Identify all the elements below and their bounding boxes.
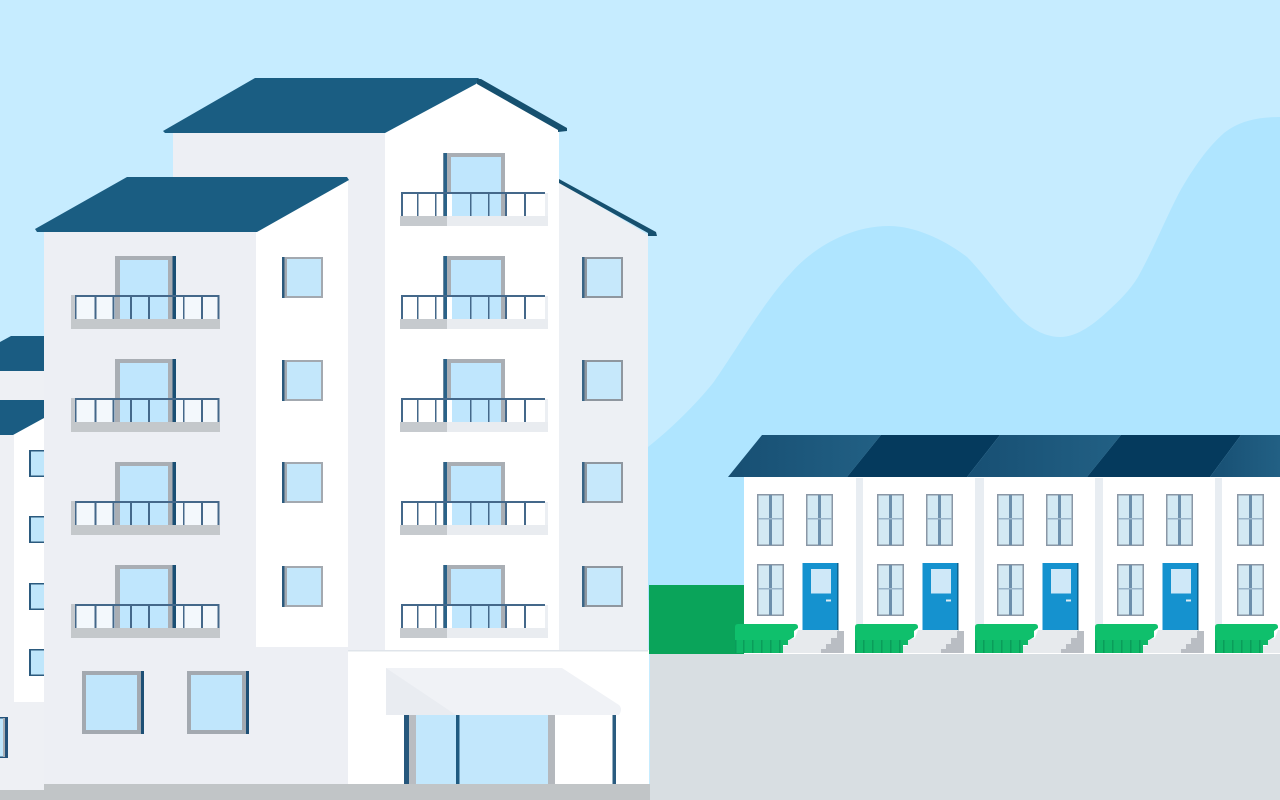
balconies right column: [400, 153, 548, 638]
far left building: [0, 336, 44, 790]
house unit four: [1095, 494, 1204, 653]
white face: [14, 414, 44, 702]
central strip: [348, 133, 385, 652]
row roof: [728, 435, 1280, 477]
party wall dividers: [856, 478, 1222, 653]
gable white face: [385, 83, 559, 652]
house unit three: [975, 494, 1084, 653]
ground floor window one: [82, 671, 144, 734]
rear wall: [0, 371, 44, 401]
ground floor window two: [187, 671, 249, 734]
side windows, left: [282, 257, 323, 607]
front side wall: [256, 180, 348, 647]
podium right: [348, 650, 649, 785]
hills: [648, 117, 1280, 600]
front left wall: [44, 232, 256, 785]
shop front: [404, 715, 616, 784]
terraced houses: [728, 435, 1280, 654]
wall: [0, 420, 44, 790]
house unit one: [735, 494, 844, 653]
lower side wall: [256, 647, 348, 785]
house wall: [744, 477, 1280, 654]
gable roof edge: [477, 79, 567, 132]
right wing roof edge: [559, 179, 657, 236]
front roof: [35, 177, 349, 232]
ground: street: [650, 654, 1280, 800]
hedge behind houses: [649, 585, 746, 654]
side windows, right: [582, 257, 623, 607]
podium line: [348, 650, 648, 652]
main apartment building: [0, 78, 657, 800]
base plinth: [44, 784, 650, 800]
windows: [0, 450, 44, 758]
balconies left column: [71, 256, 220, 638]
lower roof: [0, 400, 44, 435]
house unit five: [1215, 494, 1280, 653]
upper roof: [163, 78, 481, 133]
awning: [386, 668, 621, 715]
house unit two: [855, 494, 964, 653]
upper roof: [0, 336, 44, 371]
rear tower wall: [173, 133, 385, 253]
right wing wall: [558, 181, 648, 652]
